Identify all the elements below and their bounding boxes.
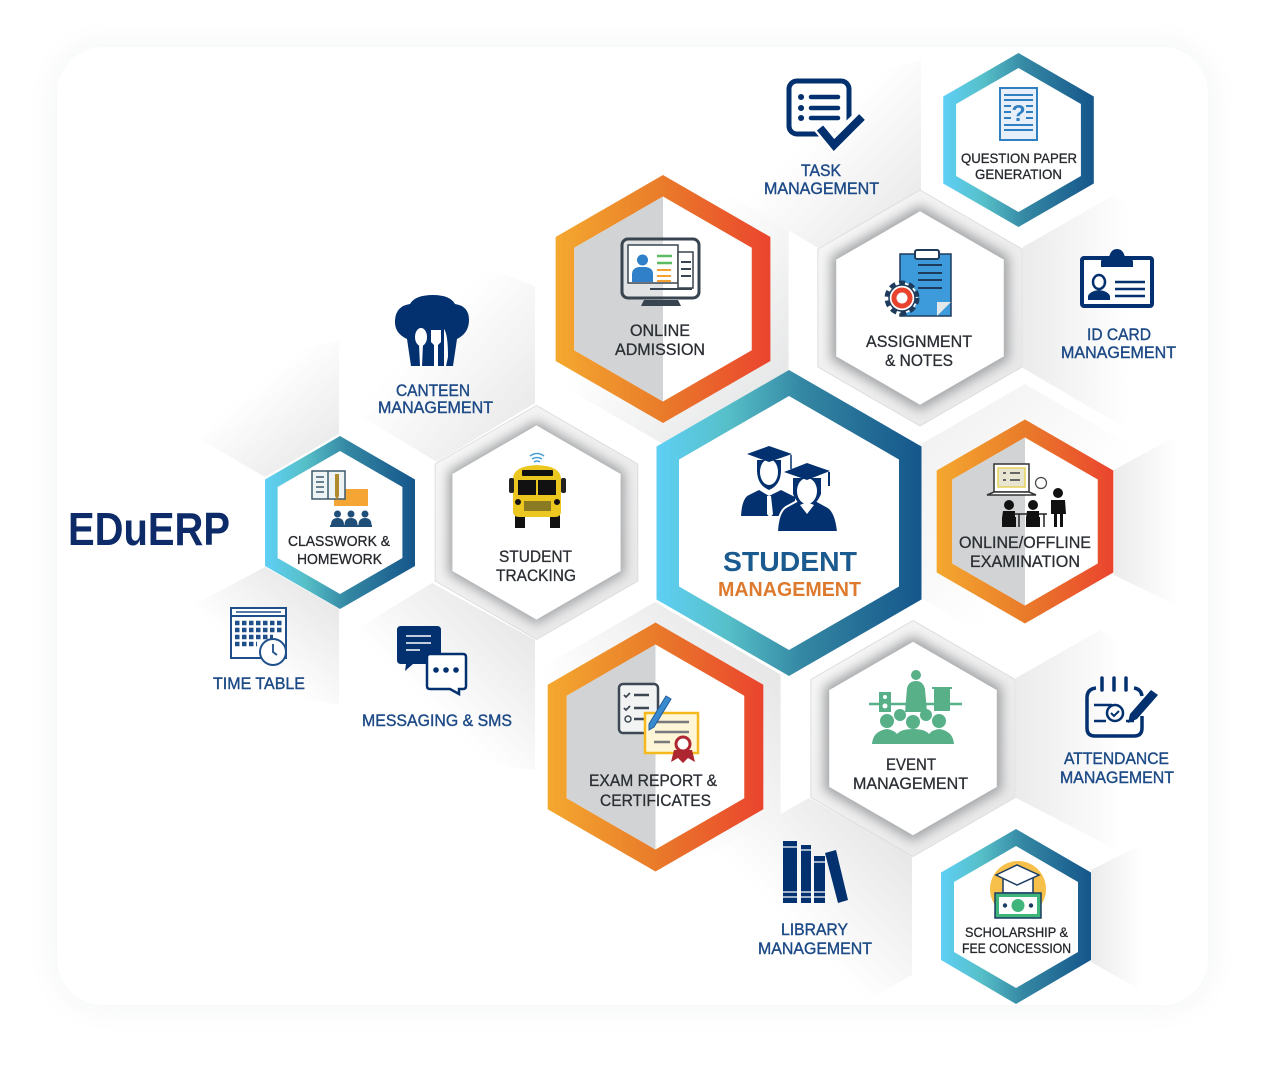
panel: student management (centre)	[657, 370, 921, 676]
icon: calendar with clock	[231, 608, 286, 665]
panel: online admission	[556, 175, 770, 423]
icon: chat bubbles	[397, 626, 466, 694]
label: online/offline examination: EXAMINATION	[970, 552, 1080, 571]
label: library management: LIBRARY	[781, 920, 848, 939]
label: online admission	[615, 321, 705, 359]
label: id card management	[1061, 325, 1176, 362]
hexagon ring	[435, 406, 638, 640]
label: task management: TASK	[801, 161, 842, 180]
label: online admission: ADMISSION	[615, 340, 705, 359]
icon: graduates	[741, 446, 838, 532]
panel: canteen management	[378, 295, 493, 417]
label: canteen management	[378, 381, 493, 417]
label: assignment and notes: & NOTES	[885, 351, 953, 370]
icon: question paper	[1000, 88, 1037, 140]
heading: student management	[718, 546, 861, 601]
heading: student management: MANAGEMENT	[718, 579, 861, 601]
label: attendance management	[1060, 749, 1174, 787]
label: event management: MANAGEMENT	[853, 774, 968, 793]
panel: task management	[764, 81, 879, 198]
label: exam report and certificates: CERTIFICATES	[600, 791, 711, 810]
label: scholarship and fee concession: SCHOLARSHIP &	[965, 924, 1069, 940]
panel: library management	[758, 841, 872, 958]
label: classwork and homework: CLASSWORK &	[288, 533, 390, 550]
hexagon ring	[265, 436, 415, 609]
label: student tracking	[496, 547, 576, 585]
hexagon ring	[556, 175, 770, 423]
icon: laptop and exam hall	[987, 464, 1066, 527]
label: online admission: ONLINE	[630, 321, 690, 340]
icon: book, board and students	[312, 471, 372, 527]
icon: graduation cap and banknote	[990, 861, 1046, 918]
label: task management	[764, 161, 879, 198]
label: question paper generation	[961, 150, 1077, 182]
label: classwork and homework	[288, 533, 390, 568]
panel: exam report and certificates	[548, 622, 763, 872]
label: time table: TIME TABLE	[213, 674, 305, 693]
label: attendance management: MANAGEMENT	[1060, 768, 1174, 787]
icon: monitor with profile	[622, 239, 699, 306]
label: assignment and notes: ASSIGNMENT	[866, 332, 972, 351]
icon: report and certificate	[619, 684, 698, 763]
icon: books	[783, 841, 848, 903]
icon: task checklist	[789, 81, 863, 145]
panel: event management	[811, 620, 1015, 856]
panel: messaging and sms	[362, 626, 512, 730]
label: canteen management: CANTEEN	[396, 381, 470, 400]
label: canteen management: MANAGEMENT	[378, 398, 493, 417]
label: attendance management: ATTENDANCE	[1064, 749, 1169, 768]
icon: school bus	[509, 454, 566, 528]
panel: id card management	[1061, 249, 1176, 362]
icon: speaker and audience	[869, 670, 962, 744]
icon: id card	[1082, 249, 1152, 306]
hexagon ring	[937, 420, 1113, 624]
label: scholarship and fee concession	[962, 924, 1071, 956]
label: library management	[758, 920, 872, 958]
panel: assignment and notes	[818, 190, 1022, 426]
label: exam report and certificates	[589, 771, 718, 810]
icon: chef hat with cutlery	[395, 295, 469, 366]
icon: clipboard and gear	[886, 250, 951, 316]
panel: time table	[213, 608, 305, 693]
label: exam report and certificates: EXAM REPORT &	[589, 771, 718, 790]
hexagon ring	[657, 370, 921, 676]
label: event management	[853, 755, 968, 793]
hexagon ring	[943, 53, 1094, 227]
label: task management: MANAGEMENT	[764, 179, 879, 198]
label: online/offline examination: ONLINE/OFFLINE	[959, 533, 1091, 552]
icon: attendance calendar and pen	[1087, 678, 1158, 736]
label: student tracking: STUDENT	[499, 547, 572, 566]
hexagon ring	[818, 190, 1022, 426]
label: event management: EVENT	[886, 755, 936, 774]
panel: scholarship and fee concession	[941, 829, 1091, 1004]
label: messaging and sms: MESSAGING & SMS	[362, 711, 512, 730]
hexagon ring	[941, 829, 1091, 1004]
title: EDuERP: EDuERP	[68, 503, 230, 555]
hexagon ring	[811, 620, 1015, 856]
panel: student tracking	[435, 406, 638, 640]
hexagon ring	[548, 622, 763, 872]
label: online/offline examination	[959, 533, 1091, 571]
panel: classwork and homework	[265, 436, 415, 609]
panel: question paper generation	[943, 53, 1094, 227]
label: question paper generation: QUESTION PAPER	[961, 150, 1077, 166]
heading: student management: STUDENT	[723, 546, 857, 577]
label: id card management: MANAGEMENT	[1061, 343, 1176, 362]
label: classwork and homework: HOMEWORK	[297, 551, 382, 568]
label: question paper generation: GENERATION	[975, 166, 1062, 182]
label: scholarship and fee concession: FEE CONCESSION	[962, 940, 1071, 956]
panel: online/offline examination	[937, 420, 1113, 624]
label: id card management: ID CARD	[1087, 325, 1151, 344]
label: library management: MANAGEMENT	[758, 939, 872, 958]
label: assignment and notes	[866, 332, 972, 370]
label: student tracking: TRACKING	[496, 566, 576, 585]
panel: attendance management	[1060, 678, 1174, 787]
icon: question paper: ?	[1011, 100, 1026, 126]
